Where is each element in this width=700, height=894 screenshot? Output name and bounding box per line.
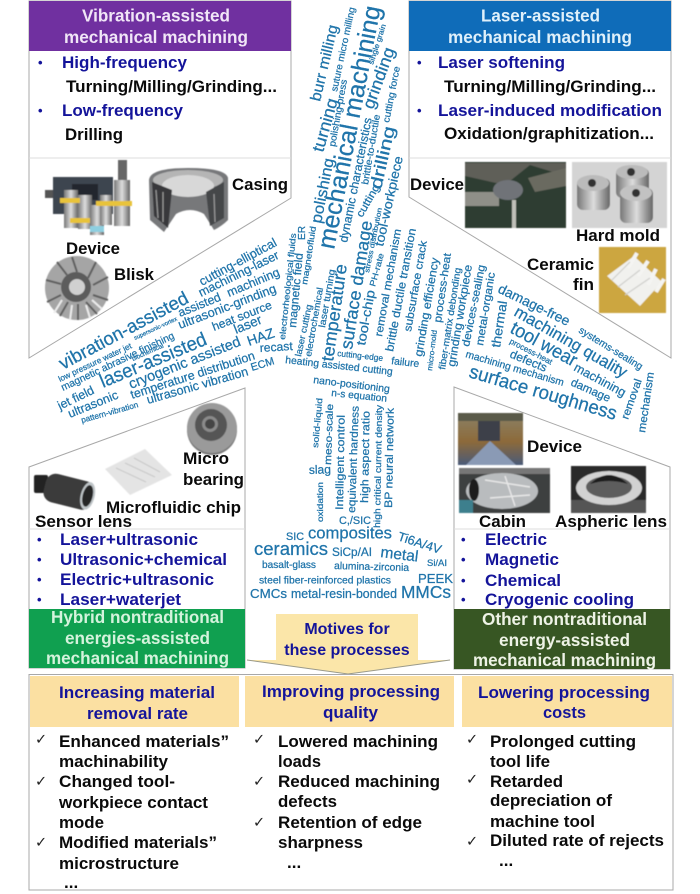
heading: hybrid energies: Hybrid nontraditional [51,607,224,627]
word cloud: center stem: Intelligent control [334,415,348,510]
word cloud: top arm: drilling [366,124,399,191]
word cloud: materials: steel fiber-reinforced plastics [259,576,391,586]
column: improving processing quality: ✓ [253,815,265,831]
column: lowering processing costs: Retarded [490,772,563,791]
text block: vibration methods: Low-frequency [62,101,184,120]
word cloud: top arm: polishing press [327,78,350,148]
heading: other energies [454,609,670,670]
word cloud: right arm [464,281,657,433]
word cloud: left arm: assisted [176,290,223,320]
column: lowering processing costs: tool life [490,752,550,771]
column: lowering processing costs: depreciation of [490,791,612,810]
icon: ultrasonic device [45,160,132,235]
word cloud: materials: metal [380,544,419,566]
text block: other energies: Cryogenic cooling [485,590,634,609]
word cloud: top arm: stress distribution [364,207,384,273]
text block: vibration methods: • [38,55,43,70]
word cloud: center stem [309,375,397,528]
label: cabin: Cabin [479,512,526,531]
word cloud: top arm: brittle-to-ductile [360,114,383,186]
column: increasing material removal rate [30,676,239,892]
column: lowering processing costs [462,676,672,870]
word cloud: top arm: mechanical machining [312,3,387,251]
word cloud: left arm: ER [297,226,308,240]
word cloud: left arm: heat source [210,298,274,334]
text block: hybrid combinations: Laser+ultrasonic [60,530,198,549]
column: increasing material removal rate: ✓ [35,774,47,790]
label: device: Device [410,175,464,194]
text block: hybrid combinations: Laser+waterjet [60,590,181,609]
text block: other energies: • [461,552,466,567]
text block: other energies: Electric [485,530,547,549]
word cloud: right arm: process-heat [508,337,555,367]
word cloud: right arm: machining mechanism [464,349,565,389]
label: ceramic fin [527,255,594,294]
text block: hybrid combinations: • [37,572,42,587]
word cloud: left arm: ultrasonic-grinding [176,282,278,332]
panel: other nontraditional energy-assisted mechanical machining [454,387,670,670]
word cloud: materials: ceramics [254,538,328,559]
label: microfluidic chip: Microfluidic chip [106,498,241,517]
word cloud: top arm: tool-workpiece [371,155,406,248]
column: improving processing quality: Retention of edge [278,813,422,832]
word cloud: materials: alumina-zirconia [334,561,409,574]
word cloud: left arm: jet field [54,383,97,413]
column: lowering processing costs: Prolonged cutting [490,732,636,751]
column: increasing material removal rate: Modified materials” [59,833,217,852]
heading: other energies: energy-assisted [499,630,630,650]
column: increasing material removal rate: ... [64,873,78,892]
column: improving processing quality: sharpness [278,833,363,852]
word cloud: left arm: laser cutting [293,303,314,357]
word cloud: left arm: ultrasonic [66,388,120,421]
word cloud: materials: Ti6A/4V [396,530,444,557]
word cloud: left arm [54,225,420,425]
word cloud: top arm: metal-organic [474,271,498,346]
word cloud: left arm: magnetic field [287,252,306,328]
heading: other energies: Other nontraditional [482,609,647,629]
word cloud: center stem: n-s equation [331,388,388,405]
word cloud: top arm: tool-chip [353,289,378,347]
column: increasing material removal rate: mode [59,813,104,832]
column: increasing material removal rate: removal rate [87,704,188,723]
heading: vibration-assisted [29,1,291,51]
word cloud: materials: Si/AI [427,558,447,569]
column: increasing material removal rate: machinability [59,752,169,771]
icon: device photo [458,413,523,465]
heading: vibration-assisted: Vibration-assisted [82,6,230,26]
icon: laser device photo [465,162,566,228]
word cloud: left arm: recast [259,339,294,355]
word cloud: top arm: removal mechanism [373,228,404,338]
column: lowering processing costs: ✓ [466,772,478,788]
label: device: Device [527,437,582,456]
label: blisk: Blisk [114,265,155,284]
label: ceramic fin: Ceramic [527,255,594,274]
heading: laser-assisted: mechanical machining [448,27,632,47]
text block: vibration methods: • [38,103,43,118]
word cloud: center stem: high aspect ratio [359,411,373,503]
text block: hybrid combinations: Ultrasonic+chemical [60,550,227,569]
word cloud: top arm: cutting [354,182,383,220]
word cloud: left arm: electrorheological fluids [277,233,298,340]
text block: laser methods: Turning/Milling/Grinding... [444,77,656,96]
word cloud: top arm: grinding [359,45,399,111]
word cloud: center stem: C,/SIC [339,515,371,527]
word cloud: top arm: grinding efficiency [413,257,442,358]
icon: micro bearing [187,403,237,455]
word cloud: left arm: machining [225,265,282,300]
column: lowering processing costs: ... [499,851,513,870]
column: increasing material removal rate: Changed tool- [59,772,175,791]
word cloud: left arm: machining-laser [196,248,281,300]
column: increasing material removal rate: Enhanced materials” [59,732,229,751]
word cloud: right arm: machining quality [511,303,631,382]
label: micro bearing: bearing [183,470,244,489]
column: increasing material removal rate: Increasing material [59,683,215,702]
word cloud: top arm: surface damage [336,219,376,351]
column: improving processing quality: ... [287,853,301,872]
word cloud: top arm [307,3,510,371]
word cloud: materials: SiCp/AI [332,545,372,559]
word cloud: materials: MMCs [401,582,451,602]
column: increasing material removal rate: microstructure [59,854,179,873]
text block: laser methods: Oxidation/graphitization... [444,124,654,143]
word cloud: left arm: ultrasonic vibration [145,364,250,407]
text block: vibration methods [38,53,277,144]
column: increasing material removal rate: workpiece contact [58,793,208,812]
word cloud: top arm: process-heat [432,252,454,323]
word cloud: right arm: systems-sealing [576,325,645,373]
word cloud: right arm: machining [572,360,628,400]
column: improving processing quality [245,676,454,872]
word cloud: materials [250,524,453,602]
column: increasing material removal rate: ✓ [35,835,47,851]
word cloud: center stem: nano-positioning [313,375,391,395]
word cloud: left arm: vibration-assisted [55,287,192,374]
word cloud: top arm: devices-sealing [460,264,488,348]
word cloud: top arm: dynamic characteristics [336,116,375,244]
word cloud: top arm: turning [309,96,342,154]
label: sensor lens: Sensor lens [35,512,132,531]
heading: laser-assisted: Laser-assisted [481,6,600,26]
text block: hybrid combinations: Electric+ultrasonic [60,570,214,589]
column: lowering processing costs: ✓ [466,732,478,748]
word cloud: materials: basalt-glass [262,560,316,571]
panel: hybrid nontraditional energies-assisted mechanical machining [29,388,245,668]
word cloud: materials: PEEK [418,571,453,586]
label: device: Device [66,239,120,258]
label: micro bearing: Micro [183,449,229,468]
column: lowering processing costs: ✓ [466,834,478,850]
word cloud: left arm: magnetic abrasive finishing [60,331,177,394]
text block: vibration methods: High-frequency [62,53,188,72]
word cloud: left arm: cryogenic assisted [127,334,243,393]
word cloud: top arm: fiber-matrix debonding [437,267,464,370]
word cloud: top arm: cutting force [381,66,403,124]
word cloud: left arm: pattern-vibration [80,400,140,425]
heading: hybrid energies [29,607,245,668]
word cloud: top arm: PH-rate [367,252,386,288]
word cloud: left arm: biochemical [131,342,165,363]
word cloud: materials: composites [308,524,392,542]
word cloud: right arm: surface roughness [467,362,619,425]
icon: hard mold photo [572,162,667,228]
text block: vibration methods: Drilling [65,125,123,144]
heading: laser-assisted [409,1,671,51]
icon: casing [149,168,228,232]
label: micro bearing [183,449,244,489]
panel: motives [247,614,450,674]
word cloud: right arm: removal [620,377,645,421]
word cloud: top arm: polishing [308,157,338,225]
column: improving processing quality: Lowered machining [278,732,438,751]
word cloud: right arm: damage-free [496,281,573,329]
word cloud: center stem: solid-liquid [310,397,324,448]
column: increasing material removal rate: ✓ [35,732,47,748]
icon: ceramic fin photo [599,247,666,313]
text block: vibration methods: Turning/Milling/Grinding... [66,77,277,96]
text block: other energies: • [461,573,466,588]
word cloud: left arm: cutting-edge [337,348,384,363]
heading: vibration-assisted: mechanical machining [64,27,248,47]
label: casing: Casing [232,175,288,194]
word cloud: left arm: electrochemical [303,287,325,357]
icon: aspheric lens photo [571,466,646,513]
column: improving processing quality: ✓ [253,774,265,790]
word cloud: top arm: temperature [317,263,351,363]
word cloud: left arm: laser-assisted [96,328,210,393]
column: improving processing quality: quality [323,703,379,722]
word cloud: center stem: meso-scale [323,403,336,465]
word cloud: top arm: grinding workpiece [446,264,475,367]
word cloud: materials: CMCs [250,586,287,601]
text block: laser methods: • [417,103,422,118]
text block: laser methods [417,53,662,143]
text block: hybrid combinations: • [37,552,42,567]
icon: blisk [45,256,109,320]
word cloud: left arm: magnetofluid [299,225,318,285]
panel: laser-assisted mechanical machining [409,1,671,358]
text block: hybrid combinations [37,530,227,609]
word cloud: left arm: HAZ [245,324,277,349]
icon: cabin photo [459,468,550,513]
panel: vibration-assisted mechanical machining [29,1,291,358]
text block: hybrid combinations: • [37,532,42,547]
word cloud: left arm: temperature distribution [129,349,257,402]
text block: hybrid combinations: • [37,592,42,607]
heading: other energies: mechanical machining [473,650,656,670]
panel: motives: these processes [284,642,410,659]
word cloud: top arm: suture micro milling [329,6,358,93]
column: improving processing quality: ✓ [253,732,265,748]
icon: sensor lens [34,472,98,512]
column: improving processing quality: Reduced machining [278,772,440,791]
label: hard mold: Hard mold [576,226,660,245]
word cloud: right arm: defects [508,347,549,375]
label: ceramic fin: fin [573,275,594,294]
word cloud: center stem: equivalent hardness [346,405,362,513]
word cloud: left arm: cutting-elliptical [197,236,279,289]
word cloud: right arm: mechanism [636,371,657,433]
panel: process benefits [29,674,673,892]
text block: laser methods: Laser-induced modification [438,101,662,120]
word cloud: left arm: laser [231,312,264,337]
text block: other energies: Magnetic [485,550,559,569]
text block: other energies: • [461,592,466,607]
word cloud: right arm: damage [569,376,612,405]
word cloud: left arm: supersonic-vortex [133,316,178,342]
heading: hybrid energies: energies-assisted [65,628,210,648]
label: aspheric lens: Aspheric lens [555,512,667,531]
word cloud: top arm: thermal [488,300,510,348]
heading: hybrid energies: mechanical machining [46,648,229,668]
column: improving processing quality: defects [278,792,337,811]
word cloud: left arm: ECM [249,355,276,374]
word cloud: left arm: failure [391,356,420,370]
column: lowering processing costs: Lowering processing [478,683,650,702]
word cloud: left arm: laser turning [317,268,338,329]
column: lowering processing costs: costs [543,703,586,722]
word cloud: left arm: low pressure water jet [57,341,134,384]
word cloud: materials: SIC [286,531,304,543]
word cloud: top arm: micro-mold [425,329,439,371]
text block: laser methods: Laser softening [438,53,565,72]
word cloud: top arm: single grain [366,23,388,66]
column: improving processing quality: Improving processing [262,682,440,701]
text block: other energies [461,530,634,609]
column: improving processing quality: loads [278,752,321,771]
word cloud: top arm: subsurface crack [402,239,430,333]
column: lowering processing costs: Diluted rate of rejects [490,831,664,850]
column: lowering processing costs: machine tool [490,812,595,831]
word cloud: top arm: burr milling [307,23,342,103]
text block: other energies: • [461,532,466,547]
word cloud: center stem: oxidation [316,482,325,522]
word cloud: top arm: brittle ductile transition [384,227,419,353]
word cloud: center stem: high critical current density [372,404,384,528]
icon: microfluidic chip [105,449,172,495]
panel: motives: Motives for [304,621,390,638]
text block: laser methods: • [417,55,422,70]
word cloud: materials: metal-resin-bonded [291,586,397,601]
word cloud: right arm: tool wear [507,318,581,372]
text block: other energies: Chemical [485,571,561,590]
word cloud: center stem: slag [309,462,331,477]
word cloud: center stem: BP neural network [383,407,397,508]
word cloud: left arm: heating assisted cutting [285,355,393,378]
